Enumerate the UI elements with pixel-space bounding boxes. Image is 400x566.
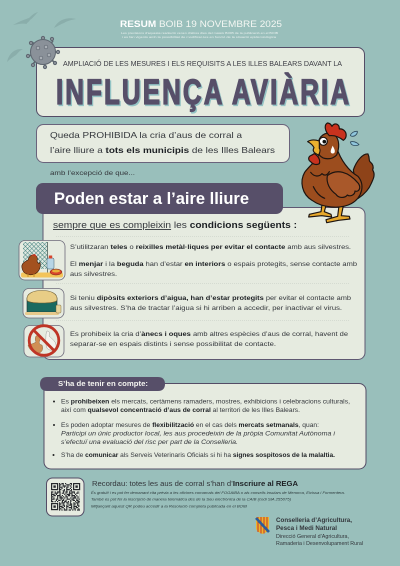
header: resum boib: Les previsions d'aquesta resolució venen d'altres dies del mateix BOIB de la publicació en el BOIB <box>121 31 278 35</box>
notes label: S’ha de tenir en compte: <box>58 379 148 388</box>
icon: flying birds <box>7 12 76 62</box>
panel: conditions <box>43 208 365 360</box>
icon: balearic coat of arms <box>256 517 269 534</box>
title panel <box>36 48 364 116</box>
note 2 <box>53 422 336 446</box>
hen eye <box>319 137 327 145</box>
logo text: conselleria: Ramaderia i Desenvolupament Rural <box>276 541 363 547</box>
condition 3 text: separar-se en espais distints i sense possibilitat de contacte. <box>70 341 276 348</box>
text: reminder <box>91 479 345 508</box>
panel: notes <box>40 377 366 469</box>
condition 1 text: aus silvestres. <box>70 271 117 278</box>
notes label <box>40 377 165 391</box>
logo text: conselleria: Pesca i Medi Natural <box>276 525 337 532</box>
logo text: conselleria: Direcció General d’Agricultura, <box>276 534 349 540</box>
icon: virus <box>26 36 60 69</box>
note 2: s’efectuï una evaluació del risc per part de la Conselleria. <box>61 439 238 446</box>
logo text: conselleria: Conselleria d’Agricultura, <box>276 517 352 524</box>
text: reminder: Recordau: totes les aus de corral s’han d’Inscriure al REGA <box>92 479 299 488</box>
title shadow and main title: INFLUENÇA AVIÀRIA <box>57 73 350 113</box>
condition 2 text: aus silvestres. S’ha de tractar l’aigua si hi arriben a accedir, per inactivar el virus. <box>70 305 342 312</box>
sweat drops <box>350 131 359 146</box>
panel: prohibition <box>36 124 290 162</box>
hen comb <box>325 123 346 140</box>
condition 1 text: S’utilitzaran teles o reixilles metàl·liques per evitar el contacte amb aus silvestres. <box>70 244 351 251</box>
hen wattle <box>309 154 320 164</box>
panel: prohibition: Queda PROHIBIDA la cria d’aus de corral a <box>50 130 242 140</box>
note 3: S’ha de comunicar als Serveis Veterinaris Oficials si hi ha signes sospitosos de la malaltia. <box>61 452 335 459</box>
banner: poden estar a l'aire lliure <box>36 183 283 214</box>
text: exception: amb l’excepció de que... <box>50 170 135 177</box>
hen head <box>318 133 339 159</box>
panel: prohibition: l’aire lliure a tots els municipis de les Illes Balears <box>50 145 275 155</box>
title intro line: AMPLIACIÓ DE LES MESURES I ELS REQUISITS A LES ILLES BALEARS DAVANT LA <box>63 59 342 68</box>
hen tail <box>353 154 374 198</box>
condition 1 text: El menjar i la beguda han d’estar en interiors o espais protegits, sense contacte amb <box>70 261 357 268</box>
bottle <box>47 258 54 269</box>
hen sweat <box>331 146 335 154</box>
banner: poden estar a l'aire lliure: Poden estar a l’aire lliure <box>54 190 249 208</box>
note 1: Es prohibeixen els mercats, certàmens ramaders, mostres, exhibicions i celebracions culturals, <box>61 398 350 406</box>
title shadow and main title: INFLUENÇA AVIÀRIA <box>56 72 349 112</box>
bowl <box>50 269 62 275</box>
text: reminder: Mitjançant aquest QR podeu accedir a la Resolució completa publicada en el BOIB <box>91 504 248 508</box>
logo text: conselleria <box>276 517 363 547</box>
condition 1 text <box>70 244 357 278</box>
icon: hen behind mesh <box>19 240 65 280</box>
text: reminder: És gratuït i es pot fer demanant cita prèvia a les oficines comarcals del FOGAIBA o als consells insulars de Menorca, Eivissa i Formentera. <box>91 490 345 495</box>
QR code <box>46 478 84 516</box>
header: resum boib: RESUM BOIB 19 NOVEMBRE 2025 <box>120 19 282 30</box>
hen beak <box>308 140 320 155</box>
icon: no ducks <box>24 326 64 357</box>
condition 2 text: Si teniu dipòsits exteriors d’aigua, han d’estar protegits per evitar el contacte amb <box>70 295 351 302</box>
header: resum boib <box>120 19 282 39</box>
hen legs <box>309 202 350 223</box>
note 2: Participi un únic productor local, les aus procedeixin de la pròpia Comunitat Autònoma i <box>61 430 336 438</box>
mini hen <box>22 255 40 275</box>
condition 2 text <box>70 295 351 312</box>
note 1 <box>53 398 350 414</box>
hen body <box>302 148 362 207</box>
mesh <box>23 242 47 269</box>
note 1: així com qualsevol concentració d’aus de corral al territori de les Illes Balears. <box>61 407 300 414</box>
condition 3 text: Es prohibeix la cria d’ ànecs i oques amb altres espècies d’aus de corral, havent de <box>70 331 348 338</box>
condition 3 text <box>70 331 348 348</box>
conditions heading: sempre que es compleixin les condicions següents : <box>53 220 297 230</box>
text: reminder: També es pot fer la inscripció de manera telemàtica des de la Seu electrònica de la CAIB (codi SIA 255075) <box>91 498 291 502</box>
header: resum boib: i es fan vigents amb la possibilitat de modificar-les en funció de la situació epidemiològica <box>122 35 277 39</box>
icon: hen with worried face <box>302 123 374 223</box>
hen wing <box>327 172 360 197</box>
note 2: Es poden adoptar mesures de flexibilització en el cas dels mercats setmanals, quan: <box>61 422 319 429</box>
icon: water tank <box>23 288 64 318</box>
